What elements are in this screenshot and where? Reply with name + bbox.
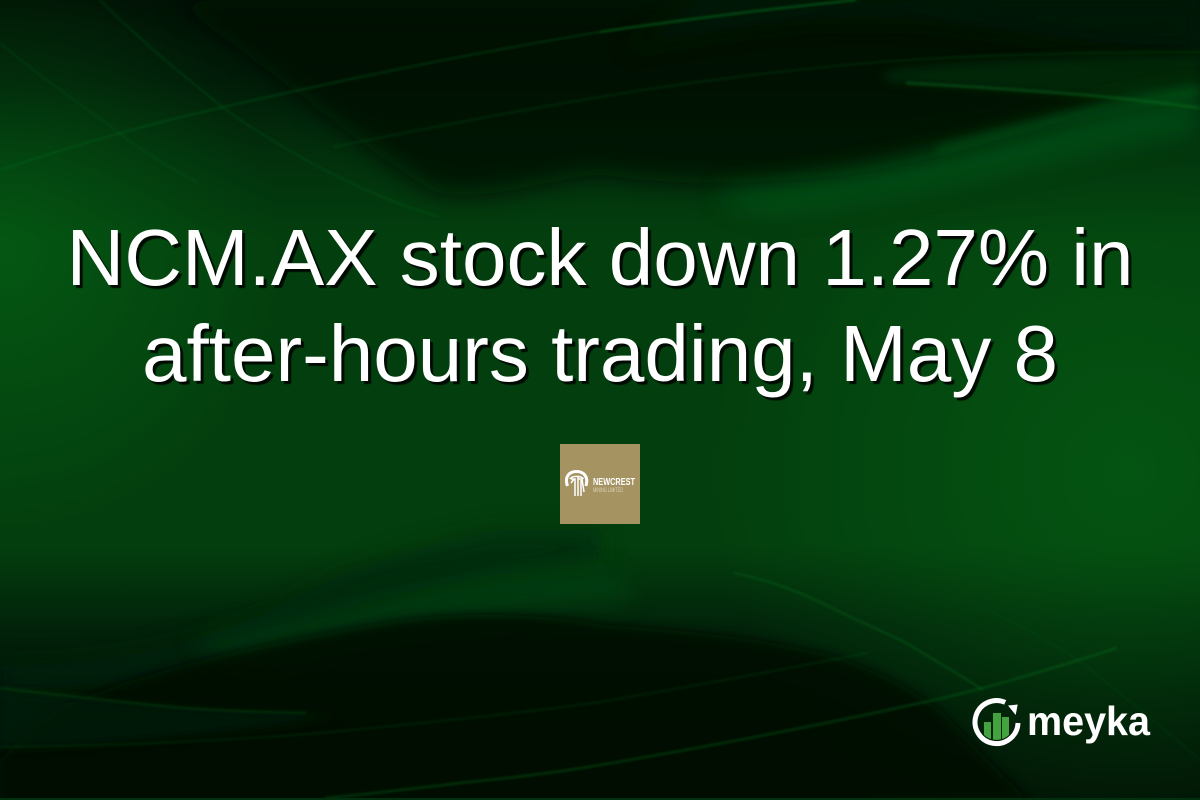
logo: meyka (972, 698, 1151, 746)
title: NCM.AX stock down 1.27% in (66, 213, 1134, 302)
title: after-hours trading, May 8 (142, 309, 1058, 398)
wordmark: meyka (1027, 698, 1151, 744)
title (66, 213, 1134, 401)
icon: Newcrest arch (566, 472, 587, 496)
logo: Newcrest Mining Limited (560, 444, 640, 524)
logo text (593, 476, 635, 494)
icon: circular arrow with bars (975, 701, 1018, 744)
wave highlights (0, 0, 856, 170)
